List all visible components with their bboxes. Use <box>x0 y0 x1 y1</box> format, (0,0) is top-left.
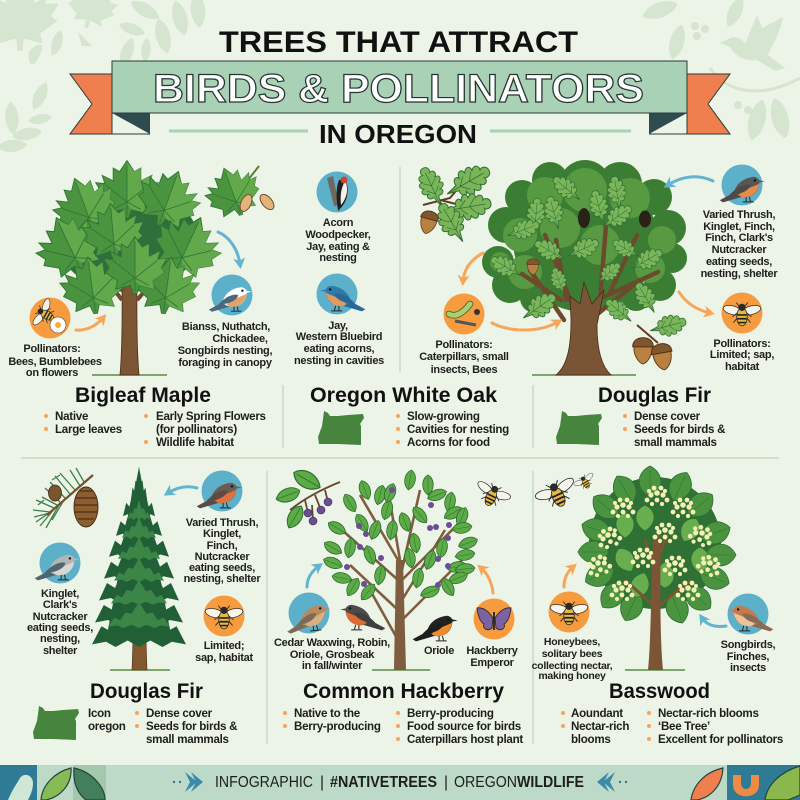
bullets: douglas fir: small mammals <box>146 733 229 746</box>
heading: bigleaf maple: Bigleaf Maple <box>75 383 211 407</box>
arrow: bees to tree <box>564 567 573 587</box>
caption: maple birds: Bianss, Nuthatch, <box>182 321 270 333</box>
heading: douglas fir: Douglas Fir <box>90 679 204 703</box>
caption: basswood birds: insects <box>730 662 766 674</box>
caption: fir birds right: Finch, <box>207 540 238 552</box>
arrow: bird to tree <box>702 618 726 627</box>
bullets: douglas fir: Dense cover <box>146 707 213 720</box>
icon: bee <box>204 596 244 636</box>
bullets: basswood right <box>647 707 783 746</box>
caption: basswood birds: Finches, <box>727 651 769 663</box>
caption: basswood pollinators: making honey <box>538 670 606 682</box>
caption: fir birds left: Nutcracker <box>33 611 88 623</box>
bullets: basswood left <box>561 707 629 746</box>
caption: maple birds: Chickadee, <box>212 333 268 345</box>
bullets: oak: Cavities for nesting <box>407 423 509 436</box>
bullets: hackberry right: Caterpillars host plant <box>407 733 523 746</box>
footer text: #NATIVETREES <box>330 774 437 791</box>
caption: bluebird: Western Bluebird <box>296 331 382 343</box>
caption: maple birds: foraging in canopy <box>178 357 273 369</box>
icon: varied thrush <box>720 164 765 206</box>
heading: common hackberry: Common Hackberry <box>303 679 504 703</box>
subtitle: IN OREGON <box>319 119 477 149</box>
panel: common hackberry <box>274 466 523 746</box>
caption: limited pollinators: habitat <box>725 361 760 373</box>
icon: oregon map <box>33 706 79 740</box>
icon: oak sprig with acorn <box>413 158 495 248</box>
caption: limited pollinators: Limited; sap, <box>710 349 774 361</box>
bullets: douglas fir: Seeds for birds & <box>146 720 238 733</box>
illustration: oak tree <box>482 160 687 375</box>
bullets: oak <box>396 410 509 449</box>
bullets: oak: Slow-growing <box>407 410 480 423</box>
caption: oak pollinators: Caterpillars, small <box>419 351 509 363</box>
icon: bee <box>722 292 762 334</box>
banner heading: BIRDS & POLLINATORS <box>153 67 644 111</box>
panel: bigleaf maple <box>8 159 384 449</box>
caption: basswood pollinators: solitary bees <box>542 648 603 660</box>
caption: basswood birds: Songbirds, <box>721 639 776 651</box>
bullets: basswood right: Excellent for pollinators <box>658 733 783 746</box>
caption: maple birds: Songbirds nesting, <box>178 345 273 357</box>
icon: hackberry emperor butterfly <box>474 598 514 640</box>
caption: hackberry birds: Cedar Waxwing, Robin, <box>274 637 390 649</box>
illustration: fir tree <box>92 467 186 670</box>
icon: footer orange leaf <box>691 768 723 800</box>
bullets: douglas fir <box>623 410 726 449</box>
caption: maple pollinators: Bees, Bumblebees <box>8 356 102 368</box>
footer text: WILDLIFE <box>517 774 584 791</box>
bullets: basswood right: ‘Bee Tree’ <box>658 720 710 733</box>
arrow: waxwing to tree <box>307 566 319 587</box>
panel: douglas fir bottom <box>27 467 261 746</box>
note: icon oregon: Icon <box>88 707 111 720</box>
note: icon oregon: oregon <box>88 720 126 733</box>
caption: oak pollinators: Pollinators: <box>435 339 493 351</box>
icon: footer bird tile <box>0 765 37 800</box>
icon: pair of acorns <box>633 311 688 372</box>
bullets: douglas fir: small mammals <box>634 436 717 449</box>
caption: oak birds: Varied Thrush, <box>703 209 775 221</box>
icon: honeybee <box>532 473 582 515</box>
footer text: | <box>320 774 324 791</box>
icon: oriole <box>413 616 458 641</box>
ribbon banner <box>70 61 730 134</box>
icon: woodpecker <box>316 172 358 212</box>
caption: oak birds: nesting, shelter <box>701 268 778 280</box>
bullets: maple: Wildlife habitat <box>156 436 234 449</box>
icon: bumblebee <box>470 477 514 513</box>
caption: fir birds right: Kinglet, <box>203 528 241 540</box>
icon: nutcracker <box>35 542 80 584</box>
bullets: basswood right: Nectar-rich blooms <box>658 707 759 720</box>
icon: oregon map <box>318 411 364 445</box>
bullets: maple: Large leaves <box>55 423 122 436</box>
icon: oregon map <box>556 411 602 445</box>
decorative foliage top left <box>0 0 207 153</box>
icon: bluebird <box>316 274 365 314</box>
bullets: douglas fir: Seeds for birds & <box>634 423 726 436</box>
caption: fir birds right: eating seeds, <box>189 562 255 574</box>
icon: maple sprig with samaras <box>198 159 277 224</box>
decorative foliage top right with dove <box>640 0 800 142</box>
icon: footer chevrons right <box>597 772 627 792</box>
icon: berry sprig <box>274 466 340 531</box>
bullets: basswood left: blooms <box>571 733 611 746</box>
icon: songbird <box>728 594 773 634</box>
caption: bluebird: eating acorns, <box>304 343 375 355</box>
bullets: basswood left: Nectar-rich <box>571 720 629 733</box>
caption: bluebird: nesting in cavities <box>294 355 384 367</box>
arrow: tree to bee <box>679 292 710 313</box>
caption: woodpecker: Jay, eating & <box>306 241 370 253</box>
caption: oriole: Oriole <box>424 645 454 657</box>
caption: butterfly: Emperor <box>470 657 515 669</box>
bullets: maple: (for pollinators) <box>156 423 237 436</box>
icon: varied thrush <box>197 470 242 512</box>
icon: small bee <box>572 471 598 494</box>
icon: cedar waxwing <box>285 592 332 634</box>
arrow: to canopy <box>218 232 240 264</box>
footer text: INFOGRAPHIC <box>215 774 313 791</box>
bullets: hackberry left <box>283 707 381 733</box>
caption: fir birds left: nesting, <box>40 633 80 645</box>
caption: woodpecker: Acorn <box>323 217 354 229</box>
caption: maple pollinators: Pollinators: <box>23 343 81 355</box>
caption: fir birds right: Nutcracker <box>195 551 250 563</box>
icon: robin <box>340 605 385 630</box>
caption: oak birds: Finch, Clark's <box>705 232 773 244</box>
caption: oak pollinators: insects, Bees <box>431 364 497 376</box>
arrow: thrush to fir <box>168 487 197 493</box>
caption: butterfly: Hackberry <box>466 645 519 657</box>
caption: fir birds left: eating seeds, <box>27 622 93 634</box>
bullets: hackberry right <box>396 707 523 746</box>
bullets: hackberry right: Berry-producing <box>407 707 494 720</box>
bullets: maple: Early Spring Flowers <box>156 410 266 423</box>
heading: basswood: Basswood <box>609 679 710 703</box>
icon: footer chevrons left <box>173 772 203 792</box>
bullets: basswood left: Aoundant <box>571 707 623 720</box>
caption: hackberry birds: Oriole, Grosbeak <box>290 649 375 661</box>
caption: fir birds right: Varied Thrush, <box>186 517 258 529</box>
bullets: maple <box>44 410 266 449</box>
bullets: hackberry right: Food source for birds <box>407 720 521 733</box>
bullets: oak: Acorns for food <box>407 436 490 449</box>
arrow: thrush to canopy <box>668 177 713 185</box>
bullets: maple: Native <box>55 410 89 423</box>
caption: oak birds: eating seeds, <box>706 256 772 268</box>
caption: bluebird: Jay, <box>328 320 348 332</box>
title line: TREES THAT ATTRACT <box>219 26 578 59</box>
panel: oregon white oak <box>310 158 778 449</box>
icon: bee on flower <box>29 296 70 338</box>
caption: oak birds: Nutcracker <box>712 244 767 256</box>
bullets: douglas fir <box>135 707 238 746</box>
icon: nuthatch <box>209 274 252 316</box>
arrow: pollinators to tree <box>76 318 103 330</box>
icon: footer leaves left <box>41 765 106 800</box>
illustration: hackberry tree <box>322 469 479 670</box>
caption: maple pollinators: on flowers <box>26 367 78 379</box>
footer text: OREGON <box>454 774 517 791</box>
arrow: oak canopy to caterpillars <box>463 253 483 281</box>
caption: fir birds right: nesting, shelter <box>184 573 261 585</box>
icon: caterpillar <box>444 294 484 334</box>
footer text <box>215 774 584 791</box>
caption: fir birds left: Kinglet, <box>41 588 79 600</box>
bullets: douglas fir: Dense cover <box>634 410 701 423</box>
caption: hackberry birds: in fall/winter <box>302 660 363 672</box>
icon: fir branch with cones <box>33 468 98 528</box>
caption: limited pollinators: Pollinators: <box>713 338 771 350</box>
heading: douglas fir: Douglas Fir <box>598 383 712 407</box>
icon: footer teal tile with horseshoe and leaf <box>727 765 800 800</box>
illustration: basswood tree <box>578 466 736 670</box>
caption: woodpecker: Woodpecker, <box>305 229 371 241</box>
caption: basswood pollinators: collecting nectar, <box>532 660 613 672</box>
caption: fir birds left: shelter <box>43 645 78 657</box>
bullets: hackberry left: Native to the <box>294 707 361 720</box>
heading: oregon white oak: Oregon White Oak <box>310 383 497 407</box>
icon: bee <box>548 592 590 632</box>
caption: fir pollinators: sap, habitat <box>195 652 253 664</box>
caption: fir pollinators: Limited; <box>204 640 244 652</box>
footer band <box>0 765 800 800</box>
arrow: butterfly to tree <box>481 568 493 593</box>
panel: douglas fir top <box>556 383 726 449</box>
caption: woodpecker: nesting <box>319 252 357 264</box>
footer text: | <box>444 774 448 791</box>
panel: basswood <box>532 466 783 746</box>
bullets: hackberry left: Berry-producing <box>294 720 381 733</box>
caption: oak birds: Kinglet, Finch, <box>703 221 775 233</box>
caption: basswood pollinators: Honeybees, <box>544 636 600 648</box>
caption: fir birds left: Clark's <box>43 599 77 611</box>
arrow: caterpillars to tree <box>492 322 558 330</box>
illustration: maple tree <box>26 161 231 375</box>
